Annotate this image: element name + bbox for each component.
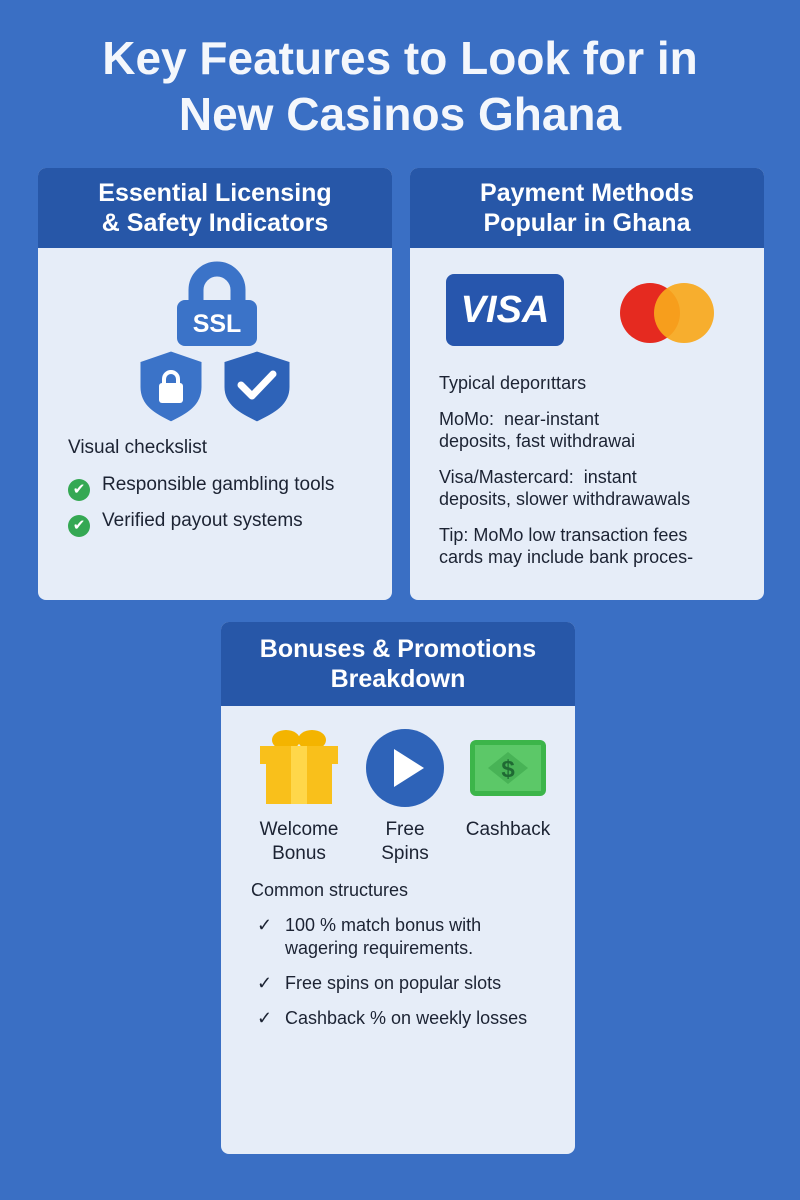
list: structures: Free spins on popular slots [285, 973, 501, 993]
title: Key Features to Look for in [102, 32, 698, 84]
checklist item 2 [68, 510, 303, 537]
text: payment info: Typical deporıttars [439, 373, 586, 393]
heading: bonuses [221, 622, 575, 706]
label: welcome bonus: Welcome [260, 819, 338, 840]
label: free spins: Spins [381, 843, 429, 864]
checklist item 2: ✔ [73, 517, 85, 534]
panel: licensing [38, 168, 392, 600]
list: structures: ✓ [257, 915, 272, 935]
text: payment info: Tip: MoMo low transaction fees [439, 525, 687, 545]
label: welcome bonus: Bonus [272, 843, 326, 864]
icon: cash [470, 740, 546, 796]
list: structures: ✓ [257, 1008, 272, 1028]
checklist item 1 [68, 474, 334, 501]
text: payment info: cards may include bank proces- [439, 547, 693, 567]
icon: mastercard [620, 283, 714, 343]
title [102, 32, 698, 140]
list: structures: 100 % match bonus with [285, 915, 481, 935]
text: payment info: deposits, slower withdrawawals [439, 489, 690, 509]
icon: visa: VISA [461, 289, 549, 331]
icon: cash: $ [501, 756, 515, 783]
icon: SSL lock and shields [140, 262, 290, 422]
list: structures [257, 915, 527, 1028]
label: free spins [381, 819, 429, 864]
list: structures: ✓ [257, 973, 272, 993]
panel: payments [410, 168, 764, 600]
label: cashback: Cashback [466, 819, 550, 840]
list: structures: Cashback % on weekly losses [285, 1008, 527, 1028]
text: payment info: MoMo: near-instant [439, 409, 599, 429]
icon: SSL lock and shields: SSL [193, 310, 241, 338]
heading: payments: Payment Methods [480, 179, 694, 207]
icon: visa [446, 274, 564, 346]
icon: play [366, 729, 444, 807]
text: payment info [439, 373, 693, 567]
text: common structures: Common structures [251, 880, 408, 900]
list: structures: wagering requirements. [285, 938, 473, 958]
checklist item 2: Verified payout systems [102, 510, 303, 531]
title: New Casinos Ghana [179, 88, 621, 140]
heading: licensing: & Safety Indicators [102, 209, 328, 237]
text: checklist heading: Visual checkslist [68, 437, 207, 458]
label: welcome bonus [260, 819, 338, 864]
icon: gift [260, 730, 338, 804]
checklist item 1: Responsible gambling tools [102, 474, 334, 495]
text: payment info: Visa/Mastercard: instant [439, 467, 637, 487]
heading: payments: Popular in Ghana [484, 209, 690, 237]
heading: licensing [38, 168, 392, 248]
checklist item 1: ✔ [73, 481, 85, 498]
heading: licensing: Essential Licensing [98, 179, 332, 207]
heading: bonuses: Breakdown [331, 665, 465, 693]
label: free spins: Free [385, 819, 425, 840]
heading: payments [410, 168, 764, 248]
panel: bonuses [221, 622, 575, 1154]
text: payment info: deposits, fast withdrawai [439, 431, 635, 451]
heading: bonuses: Bonuses & Promotions [260, 635, 536, 663]
